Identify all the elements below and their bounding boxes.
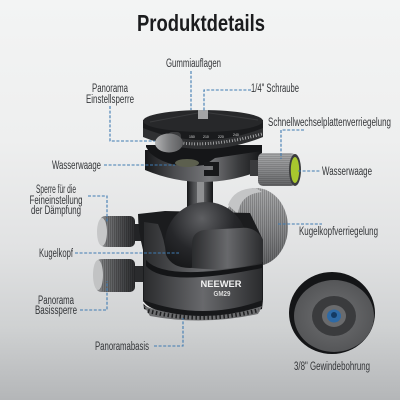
label: 1/4 inch screw (204, 83, 299, 112)
title: Produktdetails (137, 10, 265, 36)
ball (165, 202, 247, 284)
lower plate of clamp (145, 145, 262, 182)
label: Sperre fuer die Feineinstellung der Daempfung: der Dämpfung (31, 205, 81, 217)
product: ball head (93, 110, 301, 321)
label: Panorama Basissperre: Basissperre (35, 305, 77, 317)
label: Panoramabasis: Panoramabasis (95, 341, 149, 353)
right level knob (250, 153, 301, 186)
top panorama plate: 220 (218, 135, 224, 139)
top panorama plate: 210 (203, 135, 209, 139)
label: Gummiauflagen (166, 58, 221, 110)
label: 1/4 inch screw: 1/4" Schraube (251, 83, 299, 95)
top panorama plate (143, 110, 263, 149)
top panorama plate: 240 (233, 133, 239, 137)
body (138, 211, 263, 315)
brand text: GM29 (214, 291, 231, 298)
label: Wasserwaage right (298, 166, 372, 178)
label: Kugelkopf: Kugelkopf (39, 248, 74, 260)
label: Wasserwaage left: Wasserwaage (52, 160, 101, 172)
label: Schnellwechselplattenverriegelung (268, 117, 391, 159)
label: Kugelkopfverriegelung (278, 224, 378, 238)
label: Wasserwaage right: Wasserwaage (322, 166, 372, 178)
label: Kugelkopf (39, 248, 179, 260)
inset: threaded hole (289, 272, 375, 354)
label: Panorama Basissperre: Panorama (38, 295, 74, 307)
label: Panorama Einstellsperre: Einstellsperre (86, 94, 134, 106)
top left panorama lock knob (155, 132, 183, 152)
label: Sperre fuer die Feineinstellung der Daempfung (30, 184, 107, 223)
label: Panorama Einstellsperre: Panorama (92, 83, 128, 95)
large ball head lock knob (224, 188, 288, 266)
label: Sperre fuer die Feineinstellung der Daempfung: Sperre für die (36, 184, 76, 196)
cup front section (192, 228, 263, 269)
label: Sperre fuer die Feineinstellung der Daempfung: Feineinstellung (30, 195, 82, 207)
top panorama plate: 150 (189, 135, 195, 139)
panorama base ring (143, 300, 263, 321)
label: Panoramabasis (95, 318, 183, 353)
label: Gummiauflagen: Gummiauflagen (166, 58, 221, 70)
1/4 inch screw (198, 110, 208, 119)
brand text: NEEWER (200, 279, 242, 290)
label: Panorama Einstellsperre (86, 83, 155, 141)
upper left damping knob (97, 216, 147, 247)
lower left panorama base knob (93, 259, 147, 292)
label: Panorama Basissperre (35, 281, 107, 317)
cup left section (144, 222, 262, 316)
label: Wasserwaage left (52, 160, 175, 172)
brand text (200, 279, 242, 298)
post (187, 178, 213, 208)
